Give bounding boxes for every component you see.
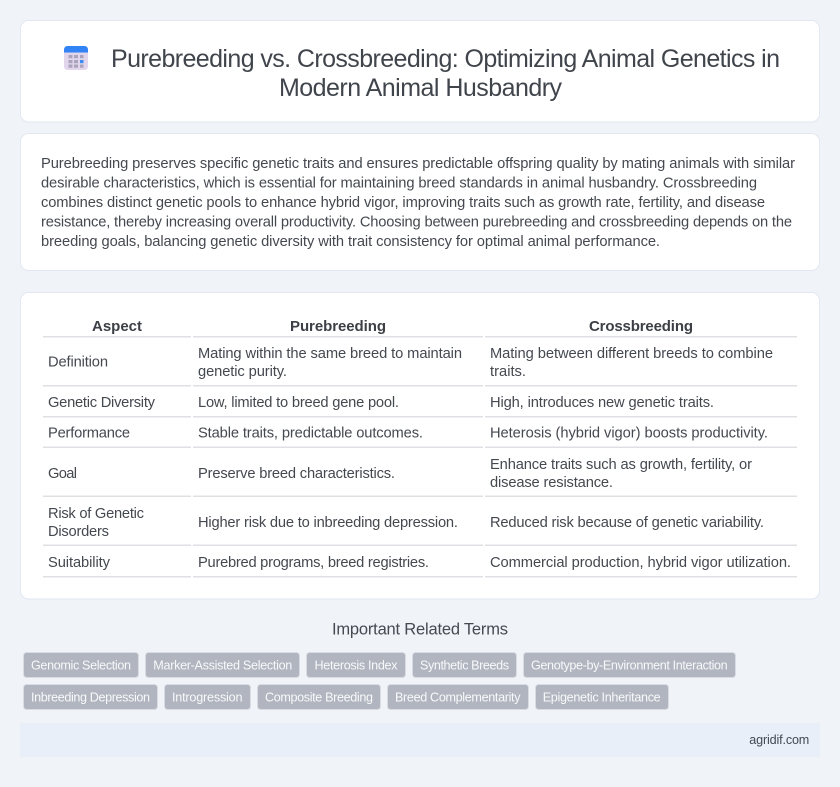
- row: performance: [43, 426, 797, 448]
- icon: calendar: [64, 46, 88, 70]
- description text: Purebreeding preserves specific genetic traits and ensures predictable offspring quality by mating animals with similar: [41, 156, 795, 172]
- table header row: Crossbreeding: [589, 318, 693, 335]
- tag: genomic selection: Genomic Selection: [31, 658, 131, 672]
- row: performance: Stable traits, predictable outcomes.: [198, 426, 423, 442]
- row: risk of genetic disorders: Risk of Genetic: [48, 506, 144, 522]
- row: definition: genetic purity.: [198, 364, 287, 380]
- description text: combines distinct genetic pools to enhance hybrid vigor, improving traits such as growth rate, fertility, and disease: [41, 195, 765, 211]
- tag: marker-assisted selection: [146, 652, 300, 678]
- row: genetic diversity: Genetic Diversity: [48, 395, 156, 411]
- footer: [20, 723, 820, 757]
- row: genetic diversity: [43, 395, 797, 418]
- tag: heterosis index: [306, 652, 406, 678]
- tag: epigenetic inheritance: Epigenetic Inheritance: [543, 690, 661, 704]
- tag: genomic selection: [24, 652, 138, 678]
- row: goal: [43, 457, 797, 497]
- tag: introgression: [164, 684, 250, 710]
- table header row: [43, 318, 797, 338]
- description text: [41, 156, 795, 250]
- tag: inbreeding depression: [24, 684, 158, 710]
- row: goal: Preserve breed characteristics.: [198, 466, 395, 482]
- tag: heterosis index: Heterosis Index: [314, 658, 398, 672]
- row: goal: Enhance traits such as growth, fertility, or: [490, 457, 752, 473]
- tag: synthetic breeds: Synthetic Breeds: [420, 658, 509, 672]
- tag: composite breeding: [258, 684, 380, 710]
- row: suitability: Purebred programs, breed registries.: [198, 555, 429, 571]
- row: goal: disease resistance.: [490, 475, 613, 491]
- tag: synthetic breeds: [412, 652, 516, 678]
- description text: desirable characteristics, which is essential for maintaining breed standards in animal husbandry. Crossbreeding: [41, 176, 757, 192]
- panel: header: [20, 20, 820, 122]
- tag: introgression: Introgression: [172, 690, 242, 704]
- row: definition: [43, 346, 797, 386]
- row: suitability: Commercial production, hybrid vigor utilization.: [490, 555, 791, 571]
- row: definition: traits.: [490, 364, 526, 380]
- row: genetic diversity: Low, limited to breed gene pool.: [198, 395, 399, 411]
- tag: composite breeding: Composite Breeding: [265, 690, 373, 704]
- tag list: [24, 652, 736, 710]
- row: performance: Heterosis (hybrid vigor) boosts productivity.: [490, 426, 768, 442]
- table header row: Aspect: [92, 318, 142, 335]
- heading: important related terms: Important Related Terms: [332, 620, 508, 638]
- row: risk of genetic disorders: Higher risk due to inbreeding depression.: [198, 515, 458, 531]
- tag: breed complementarity: [388, 684, 528, 710]
- tag: epigenetic inheritance: [536, 684, 668, 710]
- row: genetic diversity: High, introduces new genetic traits.: [490, 395, 714, 411]
- footer source: agridif.com: [749, 733, 809, 747]
- tag: inbreeding depression: Inbreeding Depression: [31, 690, 150, 704]
- tag: marker-assisted selection: Marker-Assisted Selection: [153, 658, 292, 672]
- row: definition: Mating within the same breed to maintain: [198, 346, 462, 362]
- row: performance: Performance: [48, 426, 130, 442]
- row: risk of genetic disorders: Reduced risk because of genetic variability.: [490, 515, 764, 531]
- row: definition: Definition: [48, 354, 108, 370]
- panel: description: [20, 134, 820, 270]
- title: Modern Animal Husbandry: [279, 74, 562, 102]
- description text: breeding goals, balancing genetic diversity with trait consistency for optimal animal performance.: [41, 234, 660, 250]
- description text: resistance, thereby increasing overall productivity. Choosing between purebreeding and crossbreeding depends on the: [41, 214, 792, 230]
- title: [111, 45, 780, 102]
- row: goal: Goal: [48, 466, 77, 482]
- table header row: Purebreeding: [290, 318, 386, 335]
- row: suitability: [43, 555, 797, 578]
- row: definition: Mating between different breeds to combine: [490, 346, 773, 362]
- tag: genotype-by-environment interaction: Genotype-by-Environment Interaction: [531, 658, 728, 672]
- tag: breed complementarity: Breed Complementarity: [395, 690, 521, 704]
- row: risk of genetic disorders: Disorders: [48, 524, 109, 540]
- tag: genotype-by-environment interaction: [524, 652, 736, 678]
- title: Purebreeding vs. Crossbreeding: Optimizing Animal Genetics in: [111, 45, 780, 73]
- row: suitability: Suitability: [48, 555, 111, 571]
- panel: comparison table: [20, 292, 820, 599]
- row: risk of genetic disorders: [43, 506, 797, 546]
